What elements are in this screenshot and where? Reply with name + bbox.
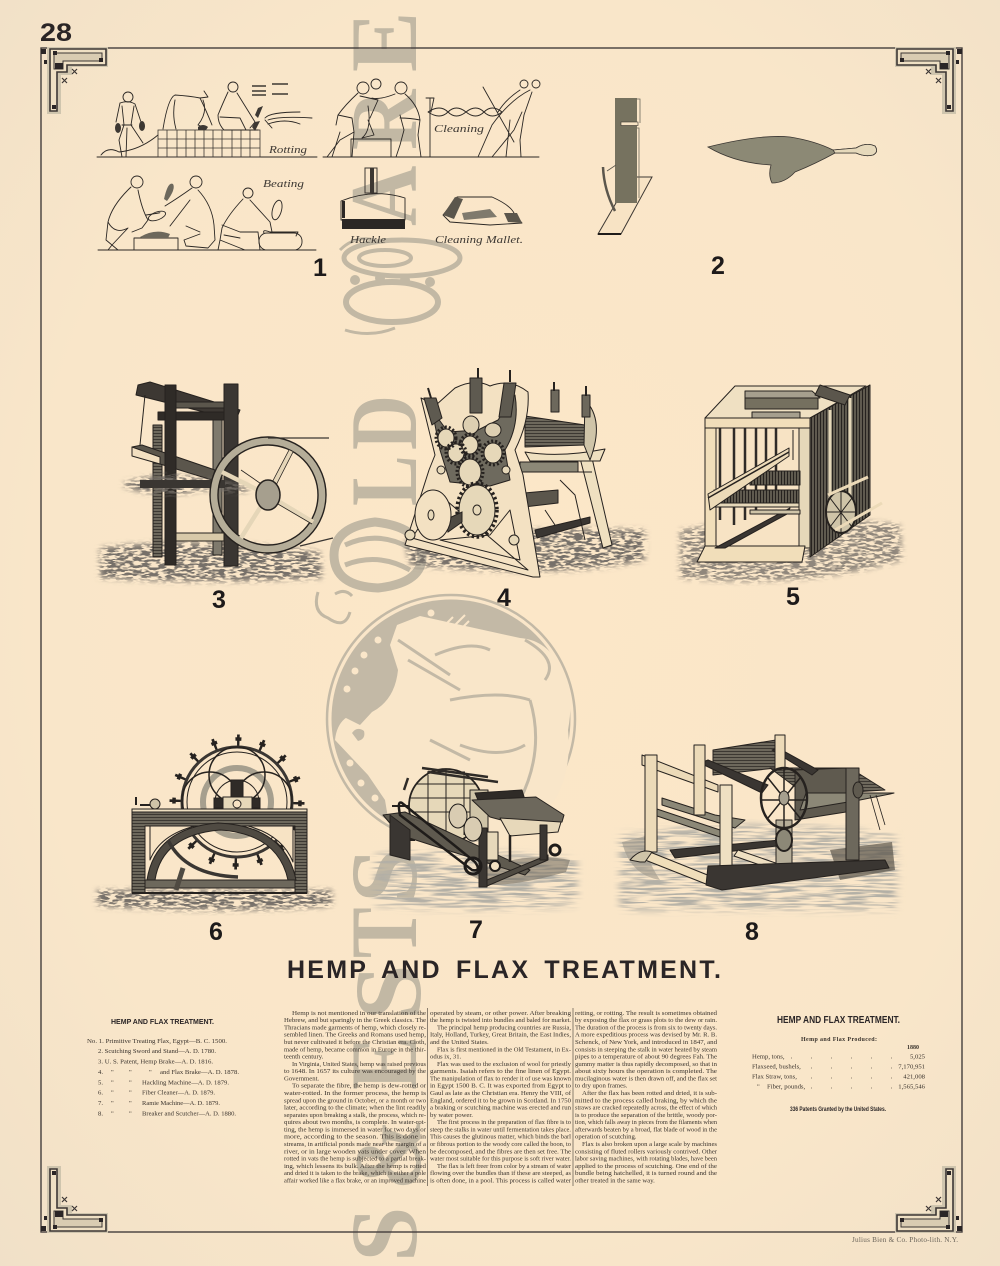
left list: inventions by date: 5. [98, 1080, 103, 1086]
right panel: production table: 7,170,951 [898, 1064, 925, 1070]
number 5: 5 [786, 583, 800, 611]
article text column 3: gummy matter is thus rapidly decomposed, so that in [575, 1061, 718, 1068]
sword [708, 136, 877, 183]
left list: inventions by date: " [149, 1069, 152, 1076]
page number: 28 [40, 19, 72, 47]
right panel: production table: 421,008 [903, 1074, 926, 1080]
printer credit: Julius Bien & Co. Photo-lith. N.Y. [852, 1236, 958, 1244]
figure 5: fiber cleaner frame [680, 385, 902, 581]
article text column 1: Government. [284, 1075, 319, 1082]
left list: inventions by date: 8. [98, 1110, 103, 1118]
left list: inventions by date: " [111, 1069, 114, 1076]
watermark: vertical lettering and medallion: L [331, 455, 437, 506]
article text column 1: separates upon breaking a stalk, the process, which re- [284, 1112, 426, 1119]
right panel: production table: Flaxseed, bushels, [752, 1064, 801, 1070]
article text column 2: Flax is first mentioned in the Old Testament, in Ex- [437, 1046, 571, 1053]
floor shading [375, 851, 577, 910]
number 8: 8 [745, 918, 759, 946]
article text column 1: water-rotted. In the former process, the hemp is [284, 1090, 426, 1097]
article text column 3: applied to the process of scutching. One end of the [575, 1163, 717, 1170]
posts [705, 418, 810, 428]
article text column 3: operation of scutching. [575, 1134, 637, 1141]
left list: inventions by date: " [111, 1080, 114, 1086]
article text column 1: ting, the hemp is immersed in water for two days or [284, 1126, 427, 1133]
figure 2: scutching sword and stand [598, 98, 877, 234]
gears [405, 427, 519, 545]
article text column 3 [575, 1010, 718, 1184]
scene: beating [98, 176, 316, 250]
article text column 2: The principal hemp producing countries are Russia, [437, 1024, 571, 1031]
article text column 2: Gaul as late as the Christian era. Henry the VIII, of [430, 1090, 572, 1097]
article text column 2: Flax was used to the exclusion of wool for priestly [437, 1061, 572, 1068]
figure 8: breaker and scutcher [620, 735, 898, 910]
left list: inventions by date: 7. [98, 1100, 103, 1107]
article text column 3: consisting of fluted rollers variously contrived. Other [575, 1148, 718, 1155]
number 4: 4 [497, 584, 511, 612]
article text column 2: in Egypt 1500 B. C. It was exported from Egypt to [430, 1083, 572, 1090]
number 6: 6 [209, 918, 223, 946]
watermark: vertical lettering and medallion: E [332, 1036, 438, 1090]
drum [392, 768, 498, 843]
article text column 2: England, ordered it to be grown in Scotland. In 1750 [430, 1097, 572, 1104]
article text column 2: steep the stalks in water until fermentation takes place. [430, 1126, 571, 1133]
belts and pulleys [399, 802, 560, 874]
right panel: production table: Hemp and Flax Produced: [801, 1037, 877, 1043]
watermark medallion [327, 595, 575, 843]
article text column 3: tion, which falls away in pieces from the filaments when [575, 1119, 718, 1126]
scene: rotting: Rotting [268, 145, 307, 156]
ground [405, 529, 645, 571]
hand wheel [761, 768, 885, 851]
article text column 1: Hebrew, and but sparingly in the Greek classics. The [284, 1017, 426, 1024]
main title: HEMP AND FLAX TREATMENT. [287, 956, 721, 984]
article text column 2: The first process in the preparation of flax fibre is to [437, 1119, 572, 1126]
watermark: vertical lettering and medallion [316, 12, 575, 1262]
left list: inventions by date: " [111, 1090, 114, 1096]
watermark: vertical lettering and medallion: & [335, 1119, 441, 1190]
left list: inventions by date: HEMP AND FLAX TREATMENT. [111, 1017, 214, 1026]
rollers on top [745, 398, 818, 409]
posts [645, 755, 657, 852]
tool: hackle: Hackle [349, 235, 386, 246]
rollers [700, 760, 768, 793]
rear panel and top [705, 386, 866, 418]
article text column 2: odus ix, 31. [430, 1054, 462, 1060]
left list: inventions by date: Fiber Cleaner—A. D. 1879. [142, 1090, 215, 1096]
article text column 1 [284, 1010, 427, 1184]
number 2: 2 [711, 252, 725, 280]
number 7: 7 [469, 916, 483, 944]
left list: inventions by date: " [129, 1069, 132, 1076]
article text column 3: After the flax has been rotted and dried, it is sub- [582, 1090, 717, 1097]
tool: cleaning mallet [435, 197, 523, 246]
watermark: vertical lettering and medallion: S [332, 1207, 437, 1262]
hemp fibres [124, 475, 248, 494]
article text column 2: The flax is left freer from color by a stream of water [437, 1163, 572, 1170]
right panel: production table: 1,565,546 [898, 1084, 926, 1090]
article text column 1: In Virginia, United States, hemp was raised previous [292, 1061, 426, 1068]
wheel [210, 437, 333, 553]
article text column 3: mucilaginous water is then drawn off, and the flax set [575, 1075, 717, 1082]
watermark: vertical lettering and medallion: A [332, 166, 437, 226]
article text column 3: bundle being hatchelled, it is turned round and the [575, 1170, 717, 1177]
main frame [405, 382, 540, 577]
article text column 3: by exposing the flax or grass plots to the dew or rain. [575, 1017, 717, 1024]
article text column 2: flowing over the bundles than if these are steeped, as [430, 1170, 571, 1177]
article text column 1: Thracians made garments of hemp, which closely re- [284, 1024, 426, 1031]
article text column 3: The duration of the process is from six to twenty days. [575, 1024, 717, 1031]
right panel: production table: " [757, 1084, 760, 1090]
article text column 3: to dry upon frames. [575, 1083, 628, 1090]
scene: beating: Beating [263, 179, 304, 190]
watermark: vertical lettering and medallion: E [332, 12, 438, 72]
watermark: vertical lettering and medallion: S [332, 848, 437, 903]
article text column 1: to 1648. In 1657 its culture was encouraged by the [284, 1068, 426, 1075]
left list: inventions by date: 6. [98, 1090, 103, 1096]
scene: rotting [97, 82, 317, 157]
article text column 3: A more expeditious process was devised by Mr. R. B. [575, 1032, 717, 1039]
right panel: production table: HEMP AND FLAX TREATMENT. [777, 1015, 900, 1026]
article text column 2: is often done, in a pool. This process is called water [430, 1178, 572, 1184]
rear and chest [713, 740, 776, 775]
rear legs and rods [580, 458, 612, 548]
article text column 1: spread upon the ground in October, or a month or two [284, 1097, 427, 1104]
combs and tray [750, 471, 800, 485]
body and table [383, 790, 564, 887]
article text column 2: be decomposed, and the fibres are then set free. The [430, 1148, 571, 1155]
article text column 1: rotted in vats the hemp is subjected to a partial break- [284, 1156, 426, 1163]
article text column 3: afterwards beaten by a broad, flat blade of wood in the [575, 1126, 717, 1133]
number 1: 1 [313, 254, 327, 282]
number 3: 3 [212, 586, 226, 614]
rails [642, 755, 718, 792]
article text column 1: To separate the fibre, the hemp is dew-rotted or [292, 1083, 427, 1090]
right panel: production table: Fiber, pounds, [767, 1084, 806, 1090]
article text column 3: about sixty hours the operation is completed. The [575, 1068, 717, 1075]
left list: inventions by date: 3. U. S. Patent, Hemp Brake—A. D. 1816. [98, 1058, 213, 1066]
article text column 3: Flax is also broken upon a large scale by machines [582, 1141, 717, 1148]
vertical slats [720, 427, 776, 525]
left list: inventions by date: Ramie Machine—A. D. 1879. [142, 1100, 220, 1107]
article text column 1: streams, in artificial ponds made near the margin of a [284, 1141, 426, 1148]
right panel: production table: Hemp, tons, [752, 1054, 785, 1060]
watermark: vertical lettering and medallion: T [331, 907, 437, 958]
spiked wheel [174, 739, 300, 865]
left list: inventions by date: 4. [98, 1069, 103, 1076]
article text column 3: is to produce the separation of the brittle, woody por- [575, 1112, 717, 1119]
small wheel [826, 477, 882, 533]
ground [680, 519, 902, 581]
article text column 2: garments. Isaiah refers to the fine linen of Egypt. [430, 1068, 571, 1075]
article text column 1: but never cultivated it before the Christian era. Cloth, [284, 1039, 426, 1046]
article text column 1: more, according to the season. This is done in [284, 1134, 427, 1141]
scene: cleaning: Cleaning [434, 124, 484, 135]
floor shading [620, 825, 898, 910]
article text column 1: river, or in large wooden vats under cover. When [284, 1148, 427, 1155]
right panel: production table: Flax Straw, tons, [752, 1074, 797, 1080]
stand [598, 98, 652, 234]
article text column 2 [430, 1010, 572, 1184]
article text column 2: operated by steam, or other power. After breaking [430, 1010, 572, 1017]
right panel: production table: 5,025 [910, 1054, 926, 1060]
left list: inventions by date: Hackling Machine—A. D. 1879. [142, 1080, 229, 1086]
article text column 1: quires about two months, is complete. In water-rot- [284, 1119, 426, 1126]
article text column 3: straws are cracked repeatedly across, the effect of which [575, 1105, 718, 1112]
right panel: production table: 336 Patents Granted by the United States. [790, 1107, 886, 1113]
frame [132, 809, 307, 893]
article text column 2: water most suitable for this purpose is soft river water. [430, 1156, 571, 1163]
article text column 2: the hemp is twisted into bundles and baled for market. [430, 1017, 571, 1024]
left list: inventions by date: Breaker and Scutcher—A. D. 1880. [142, 1110, 236, 1118]
figure 7: ramie machine [375, 768, 577, 910]
rollers [525, 416, 585, 447]
left list: inventions by date: " [129, 1090, 132, 1096]
lever and gear [136, 797, 238, 890]
left list: inventions by date: and Flax Brake—A. D. 1878. [160, 1069, 239, 1076]
article text column 3: labor saving machines, with rotating blades, have been [575, 1156, 718, 1163]
article text column 2: by water power. [430, 1112, 473, 1119]
left list: inventions by date: No. 1. Primitive Treating Flax, Egypt—B. C. 1500. [87, 1038, 227, 1045]
article text column 2: or fibrous portion to the woody core called the boon, to [430, 1141, 572, 1148]
article text column 1: made of hemp, became common in Europe in the thir- [284, 1046, 426, 1053]
tool: hackle [341, 168, 405, 246]
right panel: production table [752, 1015, 926, 1113]
figure 6: hackling machine [97, 739, 332, 910]
article text column 2: This causes the glutinous matter, which binds the barl [430, 1134, 571, 1141]
ground [97, 890, 332, 910]
article text column 1: sembled linen. The Greeks and Romans used hemp, [284, 1032, 426, 1039]
right panel: production table: 1880 [907, 1045, 919, 1051]
left list: inventions by date: " [129, 1100, 132, 1107]
watermark: vertical lettering and medallion: S [336, 965, 441, 1020]
left list: inventions by date: 2. Scutching Sword and Stand—A. D. 1780. [98, 1048, 216, 1055]
article text column 1: ing, which lessens its bulk. After the hemp is rotted [284, 1163, 427, 1170]
watermark: vertical lettering and medallion: D [331, 395, 437, 450]
article text column 1: affair worked like a flax brake, or an improved machine [284, 1178, 426, 1184]
article text column 2: a braking or scutching machine was erected and run [430, 1105, 572, 1112]
watermark: vertical lettering and medallion: R [332, 88, 437, 150]
article text column 3: mitted to the process called braking, by which the [575, 1097, 717, 1104]
tool: cleaning mallet: Cleaning Mallet. [435, 235, 523, 246]
left list: inventions by date: " [111, 1110, 114, 1118]
article text column 3: Schenck, of New York, and introduced in 1847, and [575, 1039, 718, 1046]
left list: inventions by date [87, 1017, 239, 1118]
article text column 1: later, according to the climate; when the lint readily [284, 1105, 427, 1112]
figure 3: hemp brake [100, 382, 333, 582]
figure 4: hemp brake with gears [405, 368, 645, 577]
figure 1: primitive treating of flax, Egypt [97, 79, 540, 250]
article text column 3: other treated in the same way. [575, 1178, 655, 1184]
scene: cleaning [323, 79, 540, 157]
left list: inventions by date: " [129, 1080, 132, 1086]
left list: inventions by date: " [129, 1110, 132, 1118]
article text column 1: and dried it is taken to the brake, which is either a pole [284, 1170, 426, 1177]
article text column 1: Hemp is not mentioned in our translation of the [292, 1010, 426, 1017]
article text column 3: pipes to a temperature of about 90 degrees Fah. The [575, 1054, 717, 1060]
article text column 2: and the United States. [430, 1039, 489, 1046]
article text column 1: teenth century. [284, 1054, 324, 1060]
article text column 2: The manipulation of flax to render it of use was known [430, 1075, 572, 1082]
cylinders [424, 368, 590, 437]
article text column 3: retting, or rotting. The result is sometimes obtained [575, 1010, 718, 1017]
left list: inventions by date: " [111, 1100, 114, 1107]
article text column 2: Italy, Holland, Turkey, Great Britain, the East Indies, [430, 1032, 571, 1039]
article text column 3: consists in steeping the stalk in water heated by steam [575, 1046, 718, 1053]
ground [100, 542, 322, 582]
